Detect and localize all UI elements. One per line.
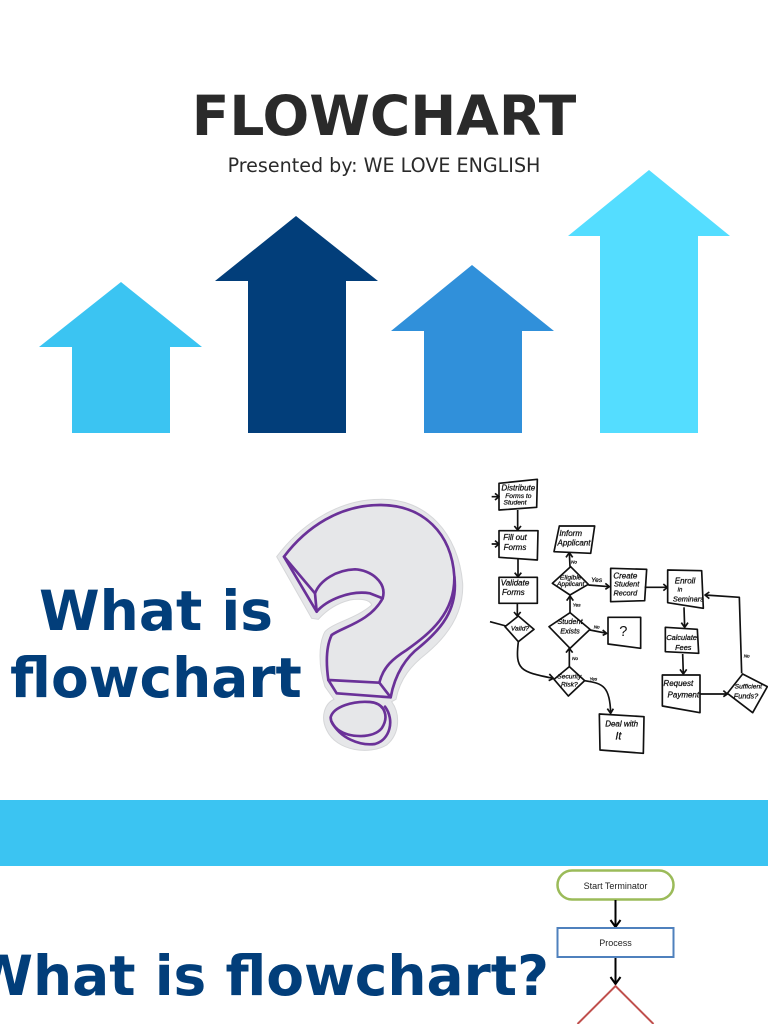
hand-drawn flowchart: Yes — [591, 577, 603, 584]
hand-drawn flowchart — [490, 478, 768, 754]
arrow 4: cyan — [568, 170, 730, 433]
arrow 3: mid blue — [391, 265, 554, 433]
hand-drawn flowchart: Forms to — [505, 493, 532, 500]
hand-drawn flowchart: Exists — [560, 626, 580, 635]
hand-drawn flowchart: No — [571, 559, 577, 564]
heading: what is flowchart: flowchart — [10, 646, 302, 710]
arrow graphics — [39, 170, 730, 433]
hand-drawn flowchart: Student — [504, 500, 528, 507]
hand-drawn flowchart: Fees — [675, 643, 692, 652]
hand-drawn flowchart: Applicant — [557, 538, 591, 547]
heading: what is flowchart: What is — [39, 579, 273, 643]
hand-drawn flowchart: No — [744, 653, 750, 658]
hand-drawn flowchart: Calculate — [666, 633, 697, 642]
hand-drawn flowchart: Risk? — [561, 682, 578, 689]
hand-drawn flowchart: Validate — [501, 579, 530, 588]
hand-drawn flowchart: Student — [614, 580, 640, 589]
hand-drawn flowchart: Applicant — [556, 581, 586, 588]
process box: Process — [599, 938, 632, 948]
hand-drawn flowchart: Request — [663, 679, 694, 688]
hand-drawn flowchart: Security — [557, 673, 582, 680]
hand-drawn flowchart: Forms — [502, 588, 525, 597]
hand-drawn flowchart: Seminars — [673, 595, 704, 604]
hand-drawn flowchart: Student — [557, 617, 584, 626]
flowchart diagram — [556, 869, 675, 1024]
arrowheads — [495, 493, 727, 713]
hand-drawn flowchart: Record — [614, 588, 638, 597]
hand-drawn flowchart: It — [615, 730, 622, 742]
hand-drawn flowchart: ? — [619, 624, 627, 640]
boxes — [499, 479, 537, 510]
hand-drawn flowchart: in — [678, 588, 683, 594]
hand-drawn flowchart: No — [572, 656, 578, 661]
hand-drawn flowchart: Deal with — [605, 720, 639, 729]
decision diamond — [578, 986, 654, 1024]
hand-drawn flowchart: Inform — [559, 529, 582, 538]
arrow — [610, 900, 620, 927]
hand-drawn flowchart: Eligible — [560, 574, 582, 581]
blue band — [0, 800, 768, 866]
hand-drawn flowchart: No — [594, 625, 600, 630]
hand-drawn flowchart: Forms — [504, 543, 526, 552]
hand-drawn flowchart: Yes — [573, 603, 581, 608]
hand-drawn flowchart: Valid? — [511, 626, 529, 633]
hand-drawn flowchart: Enroll — [675, 576, 695, 585]
hand-drawn flowchart: Create — [613, 572, 638, 581]
title: FLOWCHART — [192, 84, 576, 148]
subtitle: Presented by: WE LOVE ENGLISH — [228, 154, 540, 177]
hand-drawn flowchart: Fill out — [503, 533, 528, 542]
process box — [558, 928, 674, 957]
arrow 2: navy — [215, 216, 378, 433]
arrow — [610, 958, 620, 984]
start terminator — [558, 870, 674, 900]
flowchart labels: Distribute — [501, 484, 536, 493]
hand-drawn flowchart: Sufficient — [735, 683, 763, 690]
icon: question mark — [276, 498, 464, 751]
hand-drawn flowchart: Yes — [589, 677, 598, 682]
arrow 1: light blue — [39, 282, 202, 433]
hand-drawn flowchart: Payment — [668, 690, 700, 699]
heading: what is flowchart — [10, 579, 302, 710]
connectors — [490, 510, 553, 678]
diamonds — [552, 567, 588, 595]
hand-drawn flowchart: Funds? — [734, 691, 759, 700]
start terminator: Start Terminator — [584, 881, 647, 891]
